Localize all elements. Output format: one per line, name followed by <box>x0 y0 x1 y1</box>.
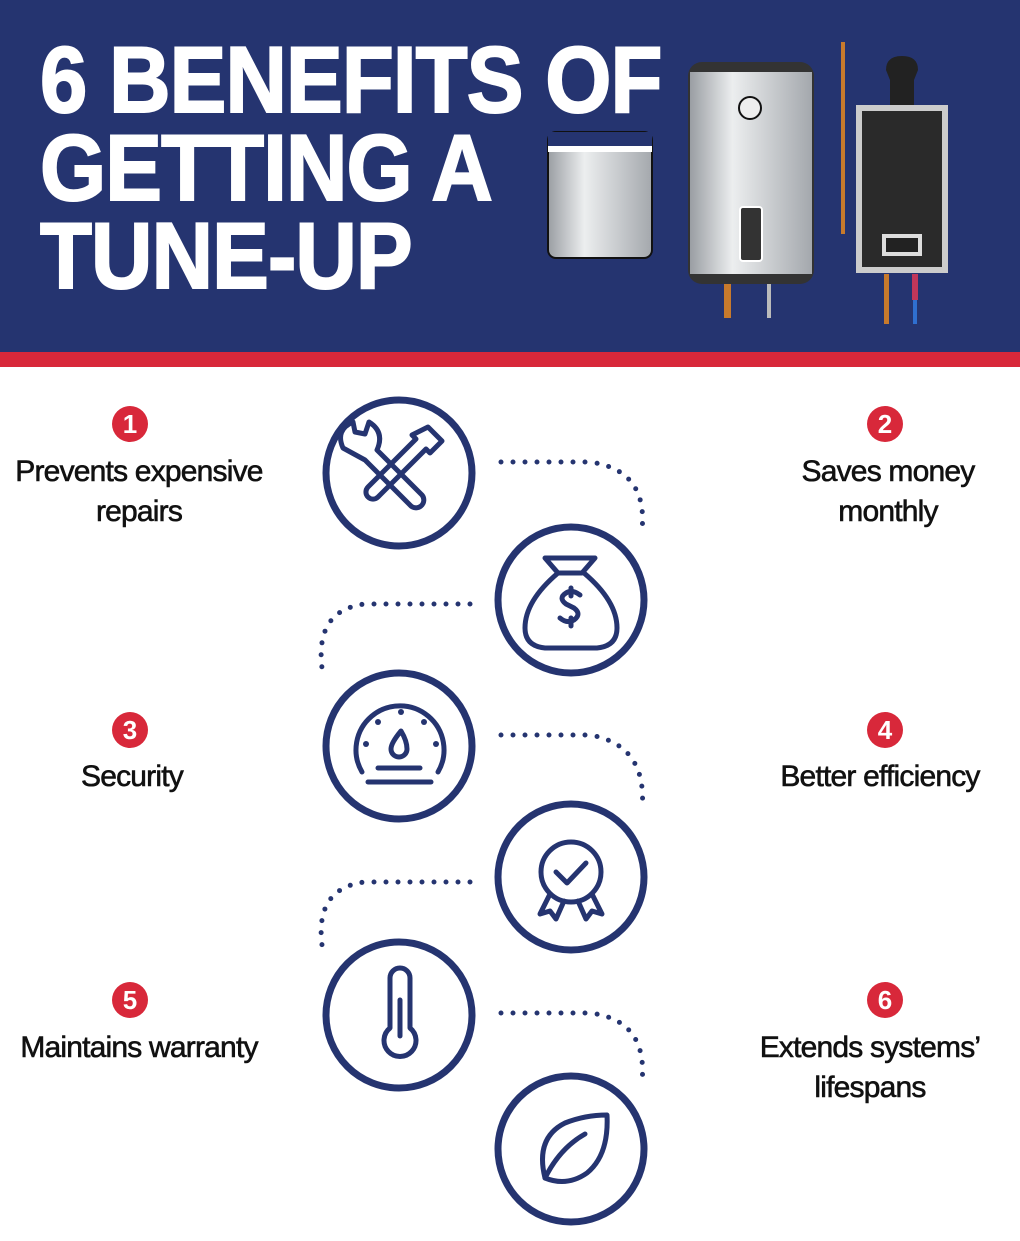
large tank <box>688 62 814 318</box>
badge 5: 5 <box>123 985 137 1015</box>
badge 6: 6 <box>878 985 892 1015</box>
label 2: Saves money <box>802 455 974 488</box>
badge 2 <box>867 406 903 442</box>
pipe <box>841 42 845 234</box>
badge 1 <box>112 406 148 442</box>
label 6: lifespans <box>814 1071 926 1104</box>
badge 3: 3 <box>123 715 137 745</box>
title: TUNE-UP <box>40 203 412 308</box>
title <box>40 27 662 308</box>
label 3: Security <box>81 760 183 793</box>
title: GETTING A <box>40 115 492 220</box>
header banner <box>0 0 1020 352</box>
small tank <box>548 132 652 258</box>
illustration: water heaters <box>547 42 948 324</box>
icon: thermometer <box>384 968 416 1056</box>
label 2 <box>802 455 976 528</box>
icon: badge <box>540 842 602 919</box>
icon: leaf <box>542 1115 607 1182</box>
label 6 <box>760 1031 980 1104</box>
badge 6 <box>867 982 903 1018</box>
badge 4 <box>867 712 903 748</box>
badge 3 <box>112 712 148 748</box>
badge 2: 2 <box>878 409 892 439</box>
icon: gauge <box>356 706 444 782</box>
label 1: Prevents expensive <box>15 455 263 488</box>
tankless unit <box>856 56 948 324</box>
label 6: Extends systems’ <box>760 1031 980 1064</box>
title: 6 BENEFITS OF <box>40 27 662 132</box>
diagram: icon path <box>318 396 648 1226</box>
icon: tools <box>341 422 442 508</box>
badge 5 <box>112 982 148 1018</box>
label 4: Better efficiency <box>780 760 980 793</box>
label 1 <box>15 455 263 528</box>
label 2: monthly <box>838 495 938 528</box>
label 5: Maintains warranty <box>20 1031 258 1064</box>
badge 1: 1 <box>123 409 137 439</box>
icon: money bag <box>525 558 617 648</box>
label 1: repairs <box>96 495 182 528</box>
badge 4: 4 <box>878 715 892 745</box>
